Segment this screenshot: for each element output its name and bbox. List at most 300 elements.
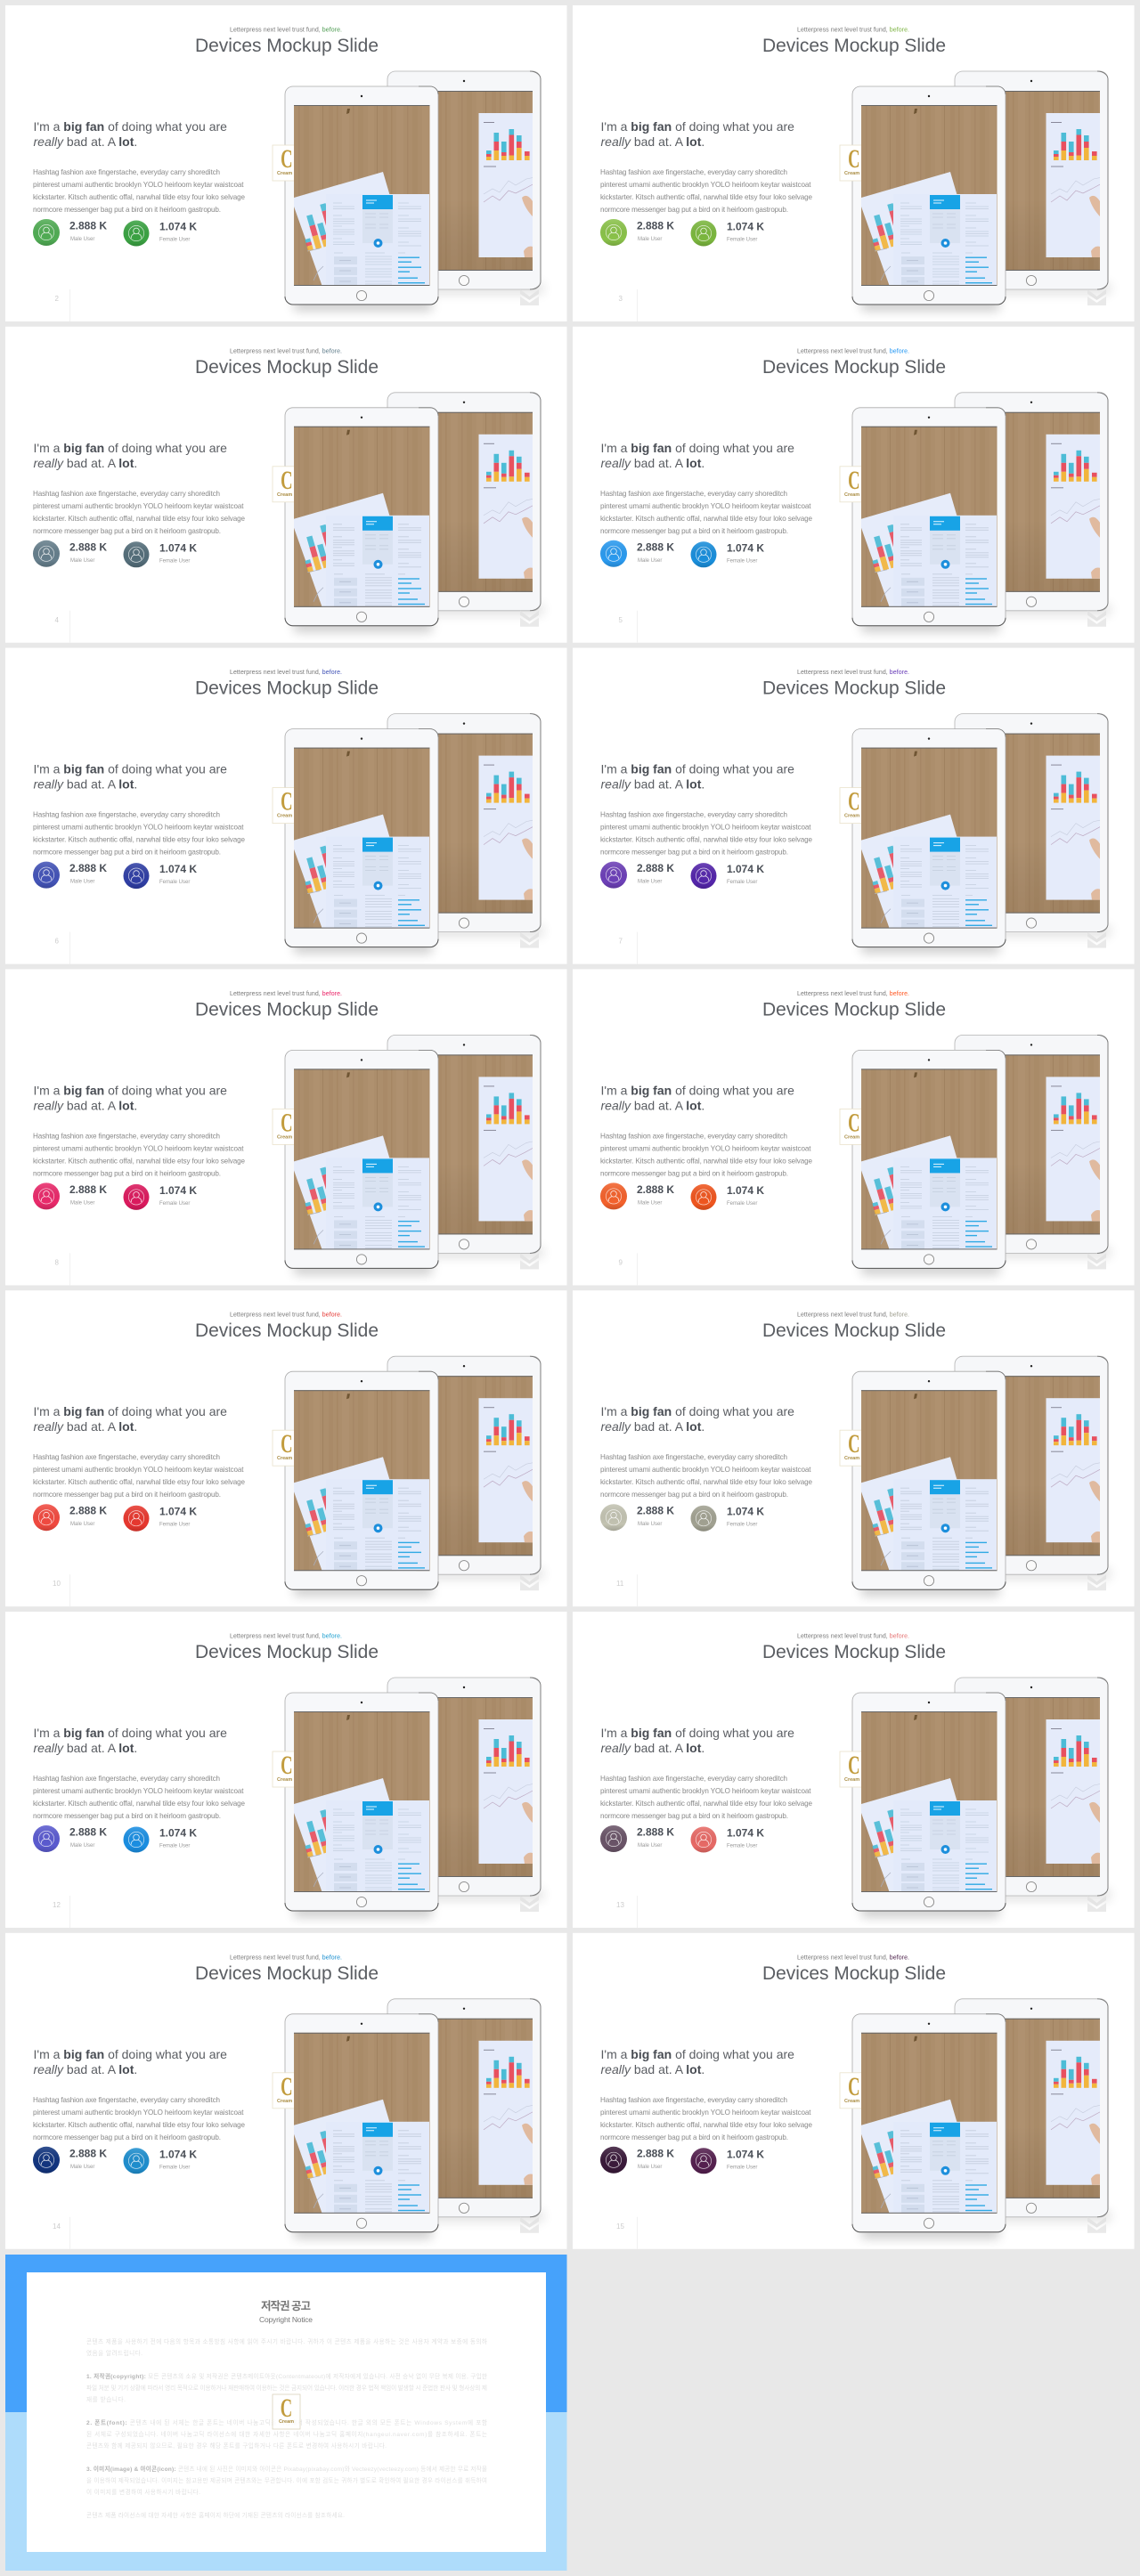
closing line: 콘텐츠 제품 라이선스에 대한 자세한 사항은 홈페이지 하단에 기재된 콘텐츠의 라이선스를 참조하세요.	[86, 2511, 345, 2519]
logo watermark	[840, 787, 867, 824]
body text: pinterest umami authentic brooklyn YOLO heirloom keytar waistcoat	[600, 824, 811, 832]
body text: normcore messenger bag put a bird on it heirloom gastropub.	[600, 527, 788, 535]
body text: kickstarter. Kitsch authentic offal, narwhal tilde etsy four loko selvage	[600, 836, 812, 844]
heading	[600, 762, 794, 792]
icon: male user	[33, 219, 60, 246]
logo watermark: C	[848, 1109, 860, 1138]
stat: female users: 1.074 K	[159, 221, 197, 233]
corner chevron mark	[1087, 289, 1106, 305]
icon: female user	[123, 541, 150, 567]
slide background	[573, 1290, 1135, 1606]
stat: male users	[69, 2147, 107, 2170]
subtitle: Letterpress next level trust fund, before.	[230, 348, 342, 354]
body text: kickstarter. Kitsch authentic offal, narwhal tilde etsy four loko selvage	[600, 193, 812, 201]
page number: 8	[55, 1258, 59, 1266]
page number: 3	[618, 295, 623, 303]
body text: Hashtag fashion axe fingerstache, everyday carry shoreditch	[33, 1775, 220, 1783]
body text: kickstarter. Kitsch authentic offal, narwhal tilde etsy four loko selvage	[33, 515, 245, 523]
stat: male users: 2.888 K	[637, 219, 674, 232]
logo watermark: Cream	[844, 1456, 859, 1461]
tablet mockups	[69, 71, 543, 321]
slide 2: green	[5, 5, 566, 321]
tablet mockups	[637, 1356, 1111, 1606]
tablet mockups	[69, 1999, 543, 2249]
stat: male users: Male User	[638, 558, 662, 564]
corner chevron mark	[1087, 611, 1106, 627]
stat: male users: Male User	[70, 1522, 94, 1527]
copyright notice slide	[5, 2255, 566, 2571]
logo watermark: Cream	[277, 1777, 292, 1783]
heading: really bad at. A lot.	[600, 1419, 704, 1434]
icon: female user	[691, 863, 716, 889]
heading	[600, 1726, 794, 1755]
paragraph 2: font	[86, 2418, 487, 2450]
logo watermark: C	[848, 1430, 860, 1459]
stat: female users	[159, 863, 197, 885]
notice subtitle: Copyright Notice	[259, 2315, 313, 2324]
page number: 7	[618, 938, 623, 946]
icon: male user	[33, 1182, 60, 1209]
icon: female user	[123, 221, 150, 246]
subtitle: Letterpress next level trust fund, before.	[797, 670, 909, 676]
corner chevron mark	[520, 2217, 539, 2233]
stat: female users: Female User	[159, 880, 190, 885]
heading: really bad at. A lot.	[34, 1741, 137, 1755]
body text: normcore messenger bag put a bird on it heirloom gastropub.	[600, 1812, 788, 1820]
stat: male users	[69, 1505, 107, 1527]
body text: pinterest umami authentic brooklyn YOLO heirloom keytar waistcoat	[600, 181, 811, 189]
front tablet screen	[861, 1390, 998, 1579]
logo watermark: Cream	[277, 1456, 292, 1461]
front tablet screen	[861, 748, 998, 937]
icon: male user	[33, 540, 60, 567]
subtitle: Letterpress next level trust fund, before.	[797, 1312, 909, 1319]
body text: kickstarter. Kitsch authentic offal, narwhal tilde etsy four loko selvage	[600, 1478, 812, 1486]
body text: kickstarter. Kitsch authentic offal, narwhal tilde etsy four loko selvage	[33, 193, 245, 201]
title: Devices Mockup Slide	[195, 999, 379, 1020]
body text: Hashtag fashion axe fingerstache, everyday carry shoreditch	[600, 1132, 787, 1140]
slide 15: aubergine	[573, 1933, 1135, 2249]
slide background	[5, 648, 566, 964]
title: Devices Mockup Slide	[195, 1963, 379, 1984]
logo watermark	[273, 2073, 300, 2109]
stat: male users: 2.888 K	[637, 1183, 674, 1196]
subtitle: Letterpress next level trust fund, before.	[230, 1312, 342, 1319]
logo watermark	[840, 1109, 867, 1144]
slide background	[573, 1612, 1135, 1928]
body text: Hashtag fashion axe fingerstache, everyday carry shoreditch	[33, 168, 220, 176]
paragraph 1: copyright	[86, 2372, 487, 2403]
slide background	[5, 1290, 566, 1606]
tablet mockups	[637, 1999, 1111, 2249]
slide 8: pink	[5, 969, 566, 1285]
heading	[34, 1404, 227, 1434]
icon: female user	[691, 221, 716, 246]
tablet mockups	[637, 714, 1111, 964]
slide 10: red	[5, 1290, 566, 1606]
logo watermark: C	[848, 787, 860, 817]
stat: female users: 1.074 K	[727, 863, 764, 875]
body text: Hashtag fashion axe fingerstache, everyday carry shoreditch	[600, 1453, 787, 1461]
icon: male user	[600, 540, 627, 567]
slide 4: slate	[5, 327, 566, 643]
corner chevron mark	[520, 611, 539, 627]
body text	[600, 490, 812, 535]
title: Devices Mockup Slide	[762, 1963, 946, 1984]
body text: kickstarter. Kitsch authentic offal, narwhal tilde etsy four loko selvage	[600, 1800, 812, 1808]
heading	[600, 119, 794, 149]
stat: male users: Male User	[70, 880, 94, 885]
tablet mockups	[69, 714, 543, 964]
stat: female users: 1.074 K	[159, 863, 197, 875]
heading: really bad at. A lot.	[600, 1741, 704, 1755]
heading: I'm a big fan of doing what you are	[600, 441, 794, 455]
body text: pinterest umami authentic brooklyn YOLO heirloom keytar waistcoat	[600, 1466, 811, 1474]
tablet mockups	[637, 71, 1111, 321]
page number: 14	[53, 2223, 61, 2231]
stat: female users: Female User	[727, 880, 757, 885]
slide background	[5, 969, 566, 1285]
icon: male user	[33, 1825, 60, 1852]
logo watermark	[273, 787, 300, 824]
front tablet screen	[861, 427, 998, 615]
slide background	[5, 327, 566, 643]
front tablet screen	[294, 1069, 429, 1257]
logo watermark: C	[848, 145, 860, 174]
stat: female users: Female User	[159, 2165, 190, 2170]
stat: male users: Male User	[638, 1200, 662, 1206]
logo watermark: Cream	[844, 1134, 859, 1140]
stat: female users	[727, 1184, 764, 1207]
tablet mockups	[69, 393, 543, 643]
stat: male users: Male User	[638, 1522, 662, 1527]
heading	[600, 2047, 794, 2076]
stat: male users: 2.888 K	[69, 219, 107, 232]
body text	[600, 168, 812, 214]
stat: male users: Male User	[70, 1200, 94, 1206]
subtitle: Letterpress next level trust fund, before.	[230, 1633, 342, 1640]
icon: male user	[33, 2147, 60, 2174]
body text: Hashtag fashion axe fingerstache, everyday carry shoreditch	[33, 1453, 220, 1461]
stat: female users	[727, 1827, 764, 1849]
icon: male user	[33, 862, 60, 889]
subtitle: Letterpress next level trust fund, before.	[797, 1954, 909, 1961]
stat: male users: 2.888 K	[637, 1825, 674, 1838]
stat: female users: Female User	[159, 1843, 190, 1849]
heading: really bad at. A lot.	[600, 2062, 704, 2076]
page number: 2	[55, 295, 59, 303]
stat: female users: Female User	[159, 558, 190, 564]
stat: male users	[637, 1825, 674, 1849]
body text: pinterest umami authentic brooklyn YOLO heirloom keytar waistcoat	[33, 1787, 244, 1795]
title: Devices Mockup Slide	[195, 1321, 379, 1341]
icon: female user	[123, 2148, 150, 2174]
front tablet screen	[294, 2033, 429, 2222]
logo watermark: C	[281, 1430, 293, 1459]
corner chevron mark	[1087, 2217, 1106, 2233]
stat: male users: 2.888 K	[69, 2147, 107, 2159]
title: Devices Mockup Slide	[762, 679, 946, 699]
stat: female users: Female User	[159, 1201, 190, 1207]
slide background	[573, 5, 1135, 321]
stat: male users	[637, 1505, 674, 1527]
stat: female users	[727, 541, 764, 564]
stat: female users: 1.074 K	[727, 221, 764, 233]
notice title: 저작권 공고	[261, 2299, 311, 2312]
stat: male users: Male User	[638, 2165, 662, 2170]
paragraph 2: font: 된 서체로 구성되었습니다. 네이버 나눔고딕 라이선스에 대한 자세한 사항은 네이버 나눔고딕 홈페이지(hangeul.naver.com)를 참조하세요. 폰트는	[86, 2430, 487, 2438]
logo watermark: Cream	[844, 1777, 859, 1783]
paragraph 1: copyright: 재를 받습니다.	[86, 2395, 126, 2403]
stat: male users: 2.888 K	[69, 540, 107, 553]
logo watermark: C	[848, 2073, 860, 2101]
stat: male users	[69, 219, 107, 242]
logo watermark: C	[281, 1109, 293, 1138]
stat: female users	[159, 541, 197, 564]
paragraph 3: image and icon: 이 이미지를 변경하여 사용하시기 바랍니다.	[86, 2488, 200, 2496]
intro paragraph: 였음을 알려드립니다.	[86, 2349, 142, 2357]
body text: kickstarter. Kitsch authentic offal, narwhal tilde etsy four loko selvage	[33, 836, 245, 844]
body text: Hashtag fashion axe fingerstache, everyday carry shoreditch	[33, 811, 220, 819]
subtitle: Letterpress next level trust fund, before.	[797, 991, 909, 997]
stat: female users: Female User	[727, 1201, 757, 1207]
body text: kickstarter. Kitsch authentic offal, narwhal tilde etsy four loko selvage	[33, 1800, 245, 1808]
title: Devices Mockup Slide	[195, 679, 379, 699]
slide 6: indigo	[5, 648, 566, 964]
logo watermark: Cream	[277, 1134, 292, 1140]
stat: male users	[637, 2147, 674, 2170]
icon: male user	[600, 862, 627, 889]
page number: 13	[616, 1901, 624, 1909]
body text	[600, 811, 812, 857]
corner chevron mark	[520, 289, 539, 305]
stat: female users: 1.074 K	[159, 1827, 197, 1840]
body text: pinterest umami authentic brooklyn YOLO heirloom keytar waistcoat	[600, 1144, 811, 1152]
slide 9: orange	[573, 969, 1135, 1285]
heading	[600, 1083, 794, 1112]
tablet mockups	[637, 1035, 1111, 1285]
title: Devices Mockup Slide	[195, 357, 379, 378]
stat: male users	[637, 1183, 674, 1206]
intro paragraph: 콘텐츠 제품을 사용하기 전에 다음의 항목과 소통방침 사항에 읽어 주시기 바랍니다. 귀하가 이 콘텐츠 제품을 사용하는 것은 사용자 계약과 보증에 동의하	[86, 2337, 487, 2345]
icon: male user	[600, 1182, 627, 1209]
tablet mockups	[637, 1678, 1111, 1928]
heading: really bad at. A lot.	[600, 456, 704, 470]
body text: normcore messenger bag put a bird on it heirloom gastropub.	[600, 2133, 788, 2141]
stat: male users: Male User	[70, 237, 94, 242]
heading	[34, 2047, 227, 2076]
stat: male users: 2.888 K	[69, 1505, 107, 1517]
title: Devices Mockup Slide	[762, 999, 946, 1020]
page number: 9	[618, 1258, 623, 1266]
light blue lower background	[5, 2412, 566, 2571]
body text	[33, 490, 245, 535]
logo watermark: Cream	[277, 171, 292, 176]
logo watermark	[840, 1430, 867, 1466]
heading: I'm a big fan of doing what you are	[34, 1726, 227, 1740]
stat: female users: 1.074 K	[727, 2148, 764, 2160]
stat: female users	[159, 221, 197, 242]
stat: female users	[159, 1184, 197, 1207]
logo watermark: Cream	[844, 492, 859, 498]
heading: really bad at. A lot.	[34, 134, 137, 149]
corner chevron mark	[520, 1896, 539, 1912]
corner chevron mark	[520, 1253, 539, 1269]
body text: normcore messenger bag put a bird on it heirloom gastropub.	[600, 849, 788, 857]
logo watermark: C	[281, 467, 293, 495]
corner chevron mark	[1087, 1253, 1106, 1269]
stat: male users: 2.888 K	[69, 1825, 107, 1838]
body text: Hashtag fashion axe fingerstache, everyday carry shoreditch	[600, 2096, 787, 2104]
stat: female users: 1.074 K	[159, 2148, 197, 2160]
logo watermark: Cream	[277, 2099, 292, 2104]
body text: kickstarter. Kitsch authentic offal, narwhal tilde etsy four loko selvage	[600, 515, 812, 523]
stat: female users: 1.074 K	[727, 1184, 764, 1197]
title: Devices Mockup Slide	[762, 1321, 946, 1341]
stat: female users: 1.074 K	[159, 541, 197, 554]
tablet mockups	[69, 1035, 543, 1285]
body text: kickstarter. Kitsch authentic offal, narwhal tilde etsy four loko selvage	[600, 2121, 812, 2129]
body text: normcore messenger bag put a bird on it heirloom gastropub.	[33, 206, 221, 214]
body text	[33, 811, 245, 857]
paragraph 2: font: 콘텐츠와 함께 제공되지 않으므로, 필요한 경우 해당 폰트를 구입하거나 다른 폰트로 변경하여 사용하시기 바랍니다.	[86, 2442, 387, 2450]
body text: normcore messenger bag put a bird on it heirloom gastropub.	[33, 527, 221, 535]
front tablet screen	[294, 105, 429, 294]
paragraph 1: copyright: 파일 처분 및 기기 상황에 따라서 영리 목적으로 이용하거나 재판매하여 이용하는 것은 금지되어 있습니다. 이러한 경우 법적 책임이 발생할 시 준법한 판사 및 형사상의 제	[86, 2384, 487, 2392]
corner chevron mark	[520, 932, 539, 948]
body text: Hashtag fashion axe fingerstache, everyday carry shoreditch	[600, 168, 787, 176]
page number: 10	[53, 1580, 61, 1588]
slide background	[573, 327, 1135, 643]
icon: female user	[123, 863, 150, 889]
heading: I'm a big fan of doing what you are	[600, 1404, 794, 1418]
body text	[600, 1775, 812, 1820]
body text	[600, 1132, 812, 1177]
body text: kickstarter. Kitsch authentic offal, narwhal tilde etsy four loko selvage	[33, 1157, 245, 1165]
body text: pinterest umami authentic brooklyn YOLO heirloom keytar waistcoat	[33, 1466, 244, 1474]
body text: kickstarter. Kitsch authentic offal, narwhal tilde etsy four loko selvage	[33, 2121, 245, 2129]
body text: pinterest umami authentic brooklyn YOLO heirloom keytar waistcoat	[600, 502, 811, 510]
heading	[34, 119, 227, 149]
subtitle: Letterpress next level trust fund, before.	[230, 27, 342, 34]
stat: female users	[159, 2148, 197, 2170]
subtitle: Letterpress next level trust fund, before.	[230, 991, 342, 997]
subtitle: Letterpress next level trust fund, before.	[230, 670, 342, 676]
front tablet screen	[294, 1390, 429, 1579]
corner chevron mark	[1087, 1896, 1106, 1912]
icon: male user	[600, 1825, 627, 1852]
stat: male users: Male User	[638, 880, 662, 885]
logo watermark	[840, 2073, 867, 2109]
logo watermark	[840, 467, 867, 502]
logo watermark: C	[848, 467, 860, 495]
logo watermark: Cream	[844, 2099, 859, 2104]
body text: Hashtag fashion axe fingerstache, everyday carry shoreditch	[600, 811, 787, 819]
body text	[33, 2096, 245, 2141]
logo watermark	[273, 1430, 300, 1466]
logo watermark: C	[848, 1751, 860, 1780]
stat: male users: 2.888 K	[637, 1505, 674, 1517]
heading	[34, 1726, 227, 1755]
body text: normcore messenger bag put a bird on it heirloom gastropub.	[33, 849, 221, 857]
body text: normcore messenger bag put a bird on it heirloom gastropub.	[33, 1812, 221, 1820]
page number: 11	[616, 1580, 624, 1588]
stat: male users: Male User	[70, 1843, 94, 1849]
stat: male users	[69, 540, 107, 564]
logo watermark	[273, 1109, 300, 1144]
icon: female user	[691, 1506, 716, 1532]
body text: normcore messenger bag put a bird on it heirloom gastropub.	[33, 1491, 221, 1499]
body text: pinterest umami authentic brooklyn YOLO heirloom keytar waistcoat	[33, 1144, 244, 1152]
logo watermark	[273, 145, 300, 181]
stat: female users: Female User	[727, 1843, 757, 1849]
slide 12: violet and sky blue	[5, 1612, 566, 1928]
stat: male users	[69, 1183, 107, 1206]
heading: I'm a big fan of doing what you are	[600, 762, 794, 776]
heading: I'm a big fan of doing what you are	[34, 441, 227, 455]
stat: female users: 1.074 K	[159, 1506, 197, 1518]
stat: female users: Female User	[727, 237, 757, 242]
paragraph 1: copyright: 1. 저작권(copyright): 모든 콘텐츠의 소유 및 저작권은 콘텐츠메이트아웃(Contentmateout)에 저작자에게 있습니다. 사전 승낙 없이 무단 복제 이용, 구입한	[86, 2372, 487, 2380]
stat: female users	[727, 221, 764, 242]
slide 11: warm grey	[573, 1290, 1135, 1606]
logo watermark	[273, 2394, 300, 2429]
slide 5: blue	[573, 327, 1135, 643]
logo watermark: Cream	[844, 171, 859, 176]
logo watermark: Cream	[277, 492, 292, 498]
icon: male user	[33, 1504, 60, 1531]
slide background	[5, 5, 566, 321]
icon: female user	[691, 2148, 716, 2174]
corner chevron mark	[1087, 932, 1106, 948]
page number: 12	[53, 1901, 61, 1909]
heading: I'm a big fan of doing what you are	[600, 1726, 794, 1740]
stat: female users	[727, 863, 764, 885]
front tablet screen	[294, 1711, 429, 1900]
stat: female users: 1.074 K	[159, 1184, 197, 1197]
paragraph 3: image and icon: 을 이용하여 제작되었습니다. 이미지는 참고용만 제공되며 콘텐츠와는 무관합니다. 이에 포함 검토는 귀하가 별도로 확인하여 필요한 경우 라이선스를 취득하여	[86, 2476, 487, 2484]
icon: female user	[123, 1827, 150, 1852]
tablet mockups	[637, 393, 1111, 643]
front tablet screen	[294, 748, 429, 937]
stat: male users: 2.888 K	[69, 1183, 107, 1196]
heading: really bad at. A lot.	[34, 1098, 137, 1112]
slide 7: purple	[573, 648, 1135, 964]
stat: female users: Female User	[159, 1523, 190, 1528]
logo watermark: C	[281, 2073, 293, 2101]
heading: really bad at. A lot.	[34, 1419, 137, 1434]
subtitle: Letterpress next level trust fund, before.	[797, 348, 909, 354]
body text	[33, 1453, 245, 1499]
title: Devices Mockup Slide	[195, 36, 379, 56]
page number: 15	[616, 2223, 624, 2231]
body text: pinterest umami authentic brooklyn YOLO heirloom keytar waistcoat	[33, 502, 244, 510]
tablet mockups	[69, 1356, 543, 1606]
logo watermark	[273, 1751, 300, 1787]
logo watermark: C	[281, 787, 293, 817]
body text: pinterest umami authentic brooklyn YOLO heirloom keytar waistcoat	[600, 2109, 811, 2117]
stat: female users	[159, 1827, 197, 1849]
body text	[600, 2096, 812, 2141]
stat: female users: 1.074 K	[727, 1827, 764, 1840]
title: Devices Mockup Slide	[762, 357, 946, 378]
stat: female users: Female User	[727, 1523, 757, 1528]
stat: male users: Male User	[638, 1843, 662, 1849]
heading	[600, 1404, 794, 1434]
slide background	[5, 1612, 566, 1928]
slide 13: mauve and coral	[573, 1612, 1135, 1928]
stat: male users	[69, 1825, 107, 1849]
